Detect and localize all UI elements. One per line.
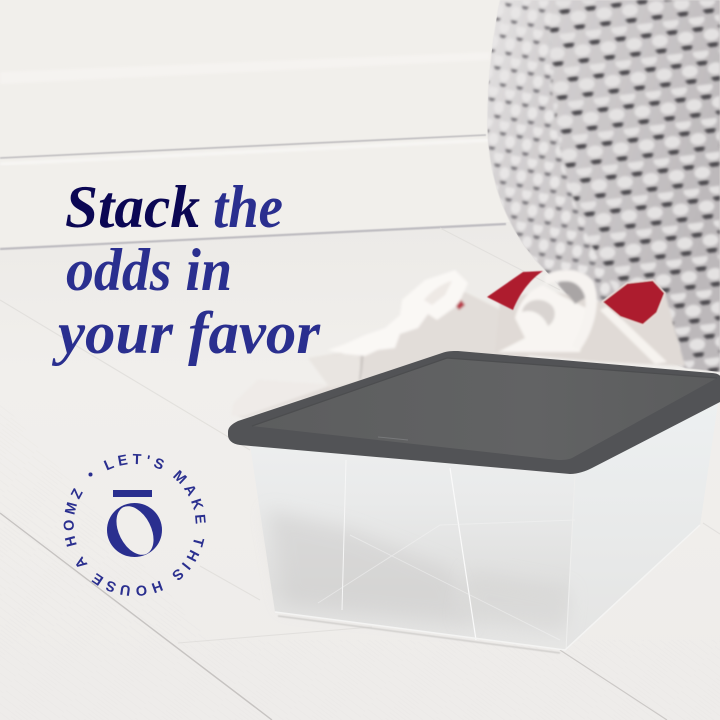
headline — [52, 174, 321, 366]
circular slogan: LET'S MAKE THIS HOUSE A HOMZ — [64, 454, 206, 596]
knitted pouf — [480, 0, 720, 380]
headline line 3: your favor — [52, 300, 321, 366]
wooden floor — [0, 222, 720, 720]
storage box — [228, 351, 720, 653]
wall and baseboard — [0, 0, 720, 250]
round logo badge — [64, 454, 206, 596]
logo mark — [107, 490, 162, 557]
grey lid — [228, 351, 720, 474]
headline line 2: odds in — [66, 237, 232, 303]
right sneaker — [495, 270, 685, 366]
headline line 1 — [65, 174, 283, 240]
transparent body — [250, 403, 718, 653]
left sneaker — [232, 270, 530, 418]
badge dot — [88, 472, 92, 476]
headline line 1: the — [213, 174, 283, 240]
headline line 1: Stack — [65, 174, 200, 240]
sneakers — [232, 270, 685, 418]
red shoe lining — [487, 271, 665, 325]
